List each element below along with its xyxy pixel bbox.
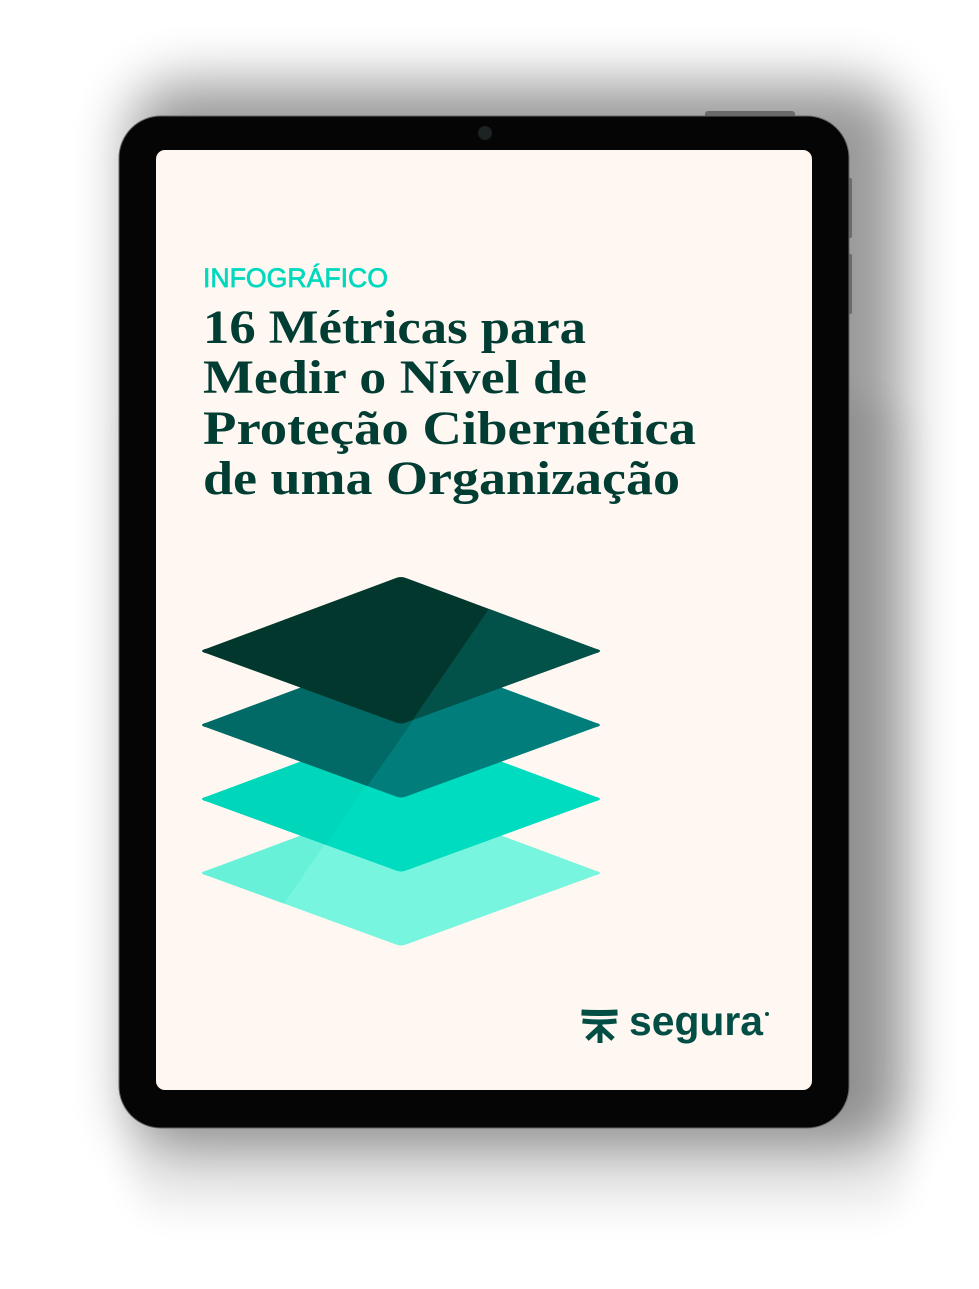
camera [478, 126, 492, 140]
layer 4: light mint [202, 836, 600, 946]
screen panel [156, 150, 812, 1090]
registered mark [765, 1012, 769, 1016]
title: Medir o Nível de [203, 351, 587, 404]
logo: segura [582, 998, 769, 1044]
layer 3: bright teal [202, 762, 600, 872]
logo mark [582, 1012, 618, 1043]
icon: stacked layers [202, 577, 600, 946]
infographic cover: tablet mockup [94, 46, 938, 1212]
title: Proteção Cibernética [203, 402, 696, 455]
layer 1: dark green [202, 577, 600, 724]
tablet body [119, 116, 849, 1128]
tablet hardware buttons [705, 111, 852, 314]
title: de uma Organização [203, 452, 680, 505]
title [203, 301, 696, 505]
title: 16 Métricas para [203, 301, 586, 354]
eyebrow label: INFOGRÁFICO [203, 263, 388, 293]
layer 2: teal [202, 688, 600, 798]
tablet drop shadow [130, 83, 910, 1215]
logo wordmark: segura [629, 998, 764, 1044]
